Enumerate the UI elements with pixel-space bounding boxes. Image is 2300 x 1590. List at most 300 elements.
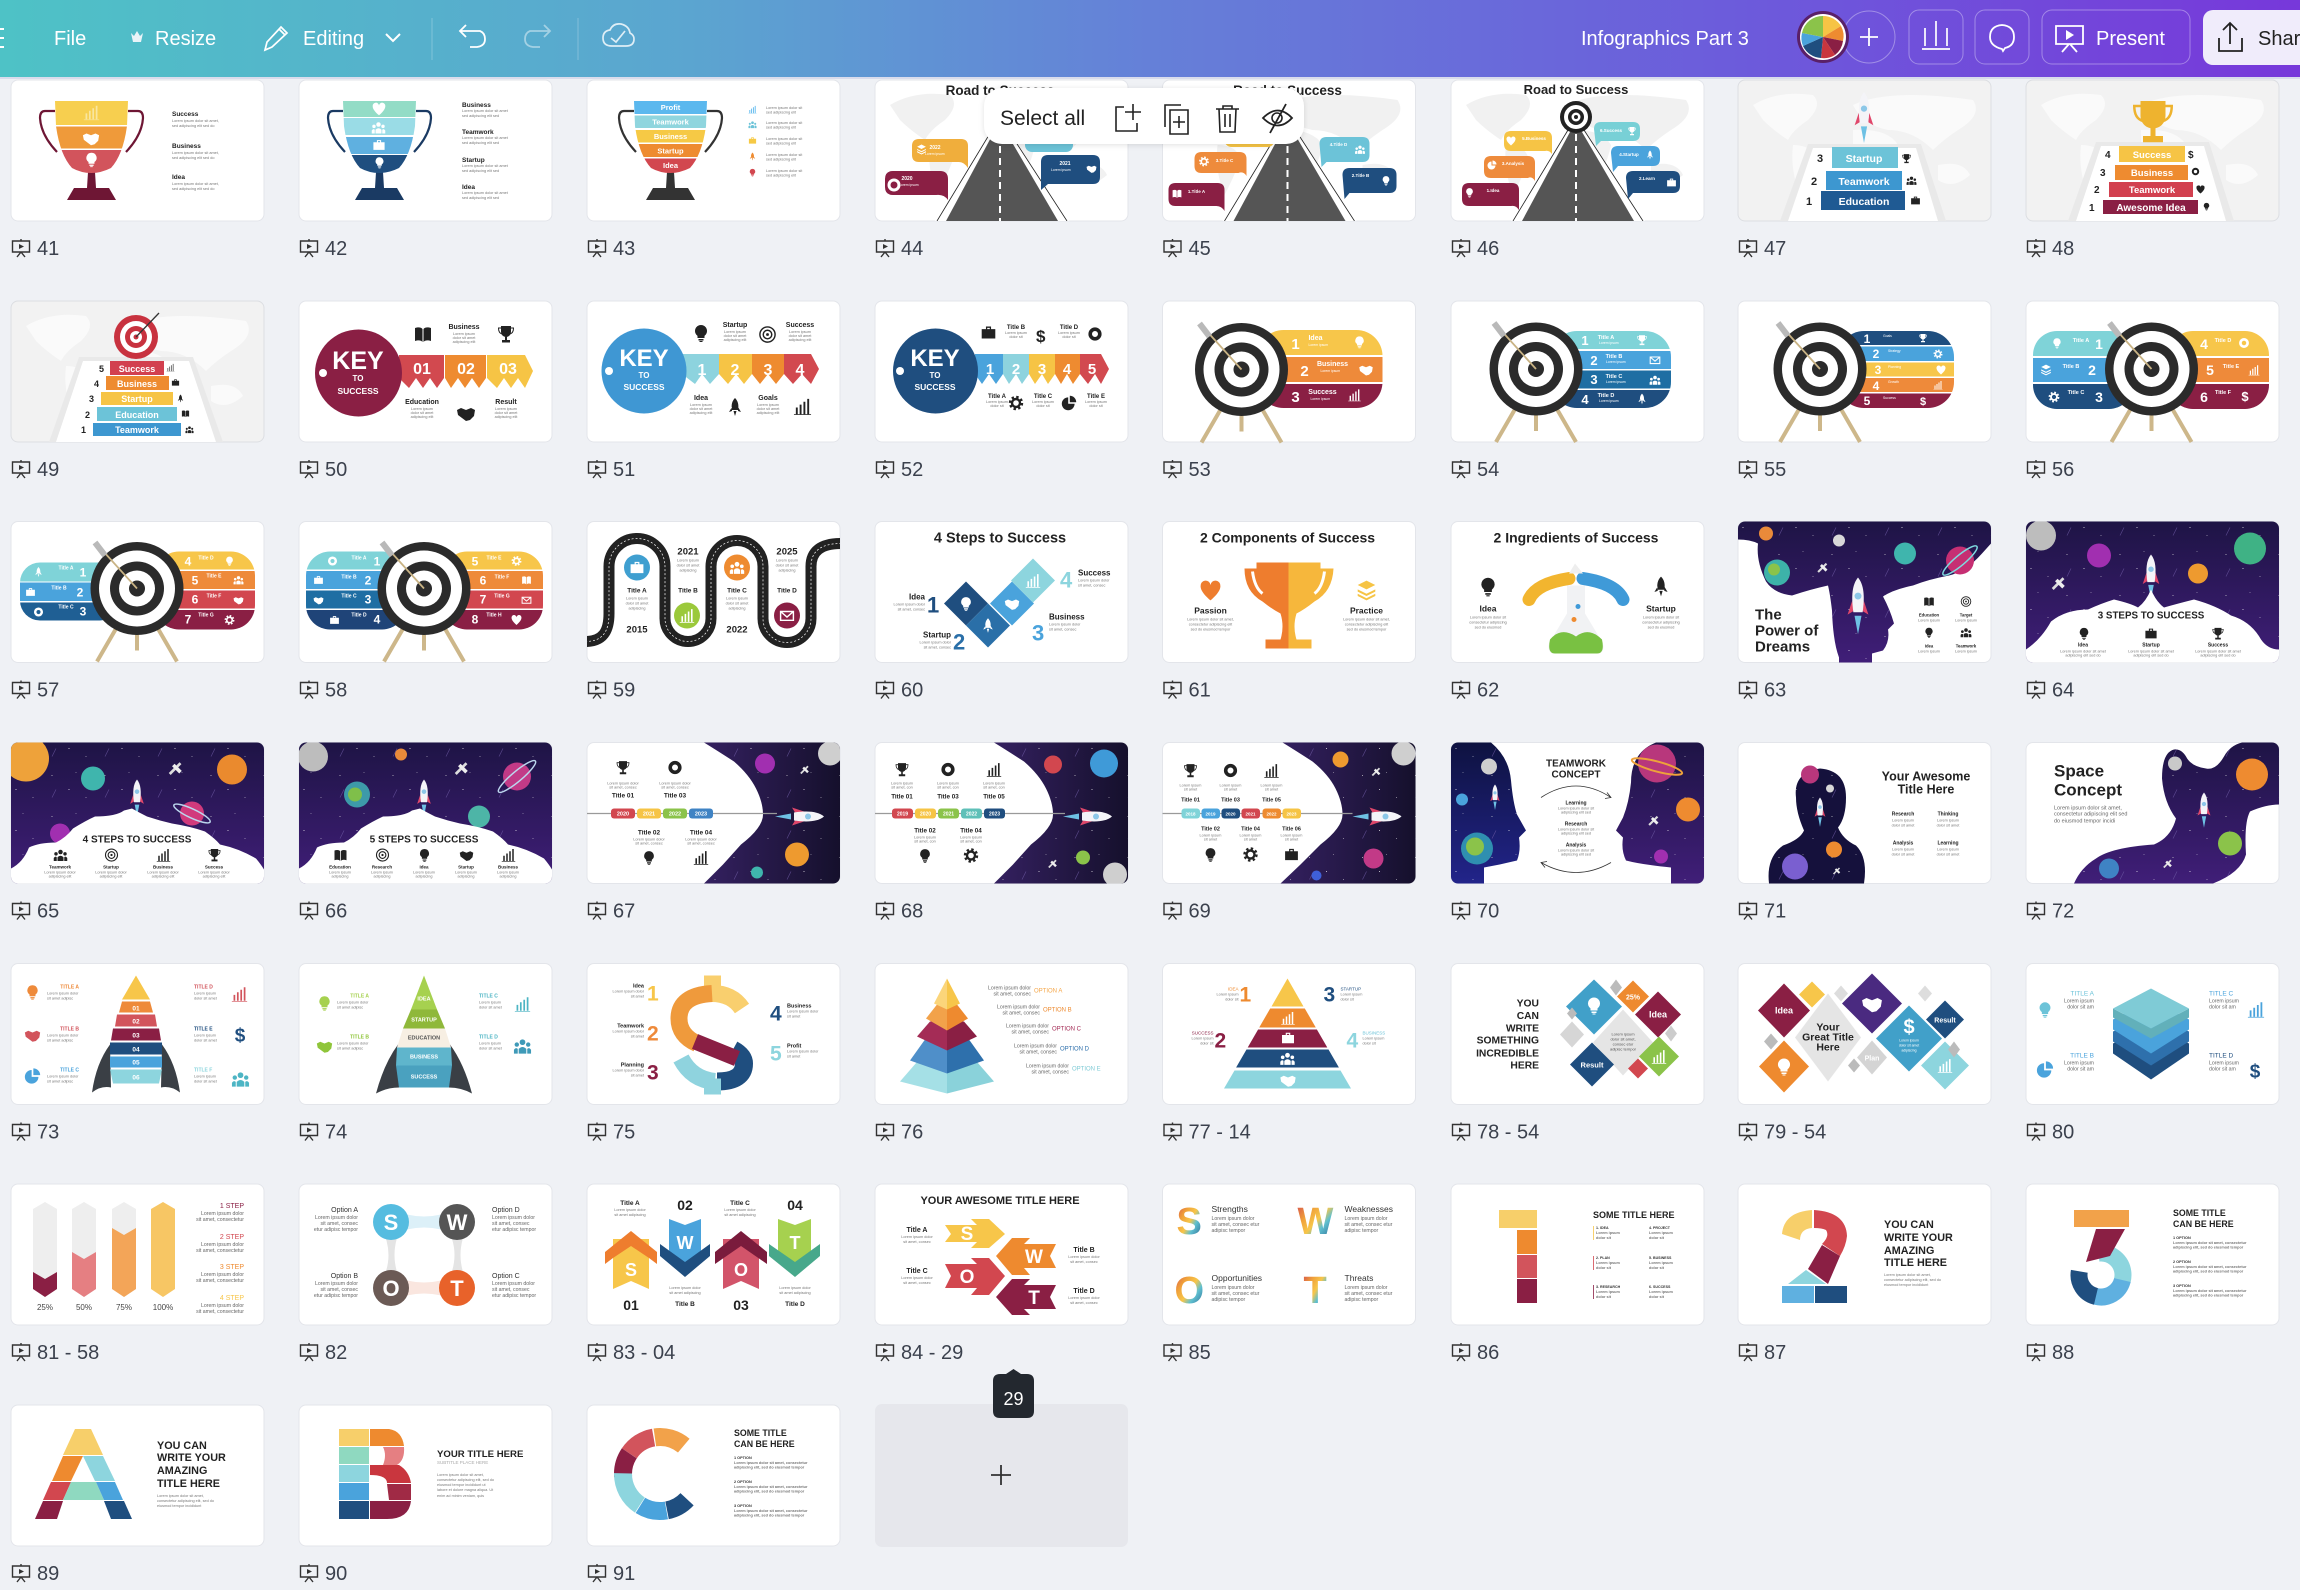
band labels: Title A [1598, 335, 1614, 341]
steps: Business [498, 864, 518, 870]
options: 2 OPTION [2173, 1260, 2191, 1264]
slide number 85: 85 [1188, 1342, 1211, 1364]
slide number 52 [876, 459, 923, 481]
options: Lorem ipsum dolor sit amet, consectetur [734, 1485, 808, 1489]
top items: sit amet [1265, 788, 1279, 792]
steps: 1 STEP [220, 1203, 244, 1210]
step labels: 4 [1060, 568, 1073, 592]
heading: AMAZING [1884, 1245, 1934, 1257]
steps: sit amet, consectetur [196, 1309, 244, 1315]
bottom items [914, 828, 982, 863]
options: dolor sit [1649, 1266, 1665, 1270]
key: 5 [1088, 361, 1096, 378]
labels: dolor sit am [2209, 1004, 2236, 1010]
rocket: 03 [132, 1032, 140, 1040]
options: Lorem ipsum [1649, 1261, 1673, 1265]
diamonds: dolor sit amet [1899, 1044, 1919, 1048]
icon grid: Lorem ipsum [1955, 650, 1977, 654]
trophy [328, 100, 431, 200]
title: Your Awesome [1882, 770, 1970, 784]
letters: S [1176, 1201, 1202, 1243]
title: Concept [2054, 780, 2122, 800]
options: Option B [331, 1273, 358, 1280]
slide number 44 [876, 238, 923, 260]
steps: Lorem ipsum [371, 870, 393, 874]
slide 56: target with six bands [2026, 301, 2279, 442]
title: TEAMWORK [1546, 758, 1607, 770]
year and title labels: Lorem ipsum [776, 558, 798, 562]
road and map [1466, 94, 1689, 221]
selection popup [984, 88, 1304, 144]
slide number 42 [300, 238, 347, 260]
letter B [339, 1429, 411, 1519]
numbered labels: 1 [647, 982, 659, 1006]
slide 55: target with five bands [1738, 301, 1991, 442]
labels: Weaknesses [1344, 1204, 1393, 1214]
road bubbles: 1.Title A [1188, 189, 1206, 194]
labels [2037, 990, 2264, 1082]
slide 75: dollar-sign puzzle [587, 964, 840, 1104]
left labels: sit amet adipisc [47, 996, 73, 1000]
icon list: Lorem ipsum dolor sit [766, 106, 803, 110]
labels: Lorem ipsum dolor [724, 1208, 756, 1212]
heading [734, 1428, 795, 1449]
body text: eiusmod tempor incididunt [157, 1504, 202, 1508]
options: 3 OPTION [2173, 1284, 2191, 1288]
slide number 53: 53 [1188, 459, 1211, 481]
timeline: 2020 [920, 812, 931, 818]
band labels: 4 [2200, 336, 2208, 352]
steps [1806, 147, 1920, 210]
right item: consectetur adipiscing [1642, 620, 1680, 624]
steps: adipiscing elit sed do [2133, 654, 2169, 658]
numbered labels: Lorem ipsum dolor [787, 1010, 819, 1014]
slide number 58 [300, 680, 347, 702]
band labels: Title D [2215, 338, 2231, 344]
icon list: sed adipiscing elit [766, 126, 797, 130]
steps: Education [329, 864, 351, 870]
key labels: Success [786, 322, 814, 329]
menu icon [0, 29, 4, 47]
key labels: Lorem ipsum [1005, 331, 1027, 335]
bottom items: Title 04 [1241, 826, 1261, 832]
four items [1892, 812, 1960, 856]
slide number 48: 48 [2052, 238, 2074, 260]
band labels: Title E [207, 574, 222, 580]
winding road [585, 538, 841, 642]
key: 3 [1038, 361, 1046, 378]
options: etur adipisc tempor [314, 1293, 358, 1299]
right item [1343, 581, 1390, 632]
timeline: 2021 [943, 812, 954, 818]
band labels: Growth [1888, 380, 1899, 384]
icon grid [1918, 597, 1977, 654]
options: OPTION E [1072, 1066, 1101, 1072]
band labels: 6 [480, 574, 487, 588]
band labels: 1 [374, 554, 381, 568]
slide 52: key with five teeth [875, 301, 1128, 442]
numbered labels: 2 [1214, 1030, 1226, 1052]
slide 48: trophy staircase [2026, 80, 2279, 221]
diamonds: adipisc tempor [1610, 1046, 1637, 1052]
labels: Opportunities [1212, 1273, 1262, 1283]
key labels: dolor sit [1009, 335, 1024, 339]
labels: Lorem ipsum [2209, 998, 2239, 1004]
steps: Lorem ipsum dolor sit amet [2128, 650, 2175, 654]
bottom items: sit amet [1244, 838, 1258, 842]
steps: Teamwork [1838, 176, 1890, 188]
body text: Lorem ipsum dolor sit amet, [437, 1473, 484, 1477]
key labels: adipiscing elit [690, 411, 713, 415]
band labels: 5 [192, 574, 199, 588]
labels: Business [462, 102, 491, 109]
labels: Lorem ipsum dolor sit amet [462, 164, 509, 168]
title: 2 Ingredients of Success [1494, 530, 1659, 546]
steps: 4 [2105, 150, 2111, 161]
band labels: 3 [80, 604, 87, 618]
bottom items [633, 830, 717, 865]
labels: Success [172, 111, 199, 118]
labels [172, 111, 219, 191]
top items: Title 01 [891, 794, 913, 800]
top items: Title 05 [983, 794, 1005, 800]
options: Lorem ipsum dolor sit amet, consectetur [734, 1461, 808, 1465]
road bubbles: 1.Idea [1487, 188, 1500, 193]
options: Lorem ipsum dolor sit amet, consectetur [2173, 1265, 2247, 1269]
labels [1212, 1204, 1393, 1303]
page count tooltip: 29 [1003, 1389, 1024, 1409]
key: 03 [499, 361, 517, 378]
body text: Lorem ipsum dolor sit amet, [2054, 806, 2122, 812]
options: dolor sit [1596, 1266, 1612, 1270]
right labels: dolor sit amet [194, 1080, 218, 1084]
band labels: Planning [1888, 365, 1901, 369]
icon list: sed adipiscing elit [766, 158, 797, 162]
rocket: BUSINESS [410, 1054, 438, 1060]
space shape [2074, 742, 2279, 884]
band labels: Title A [2073, 338, 2089, 344]
slide 89: letter A [11, 1405, 264, 1546]
slide number 91 [588, 1563, 635, 1585]
band labels: Title H [486, 612, 502, 618]
title: Space [2054, 762, 2104, 780]
year and title labels: Title D [777, 588, 797, 594]
slide 53: target with three bands [1162, 301, 1416, 442]
step labels: Business [1049, 612, 1085, 622]
heading: SUBTITLE PLACE HERE [437, 1460, 488, 1465]
steps: Idea [2078, 642, 2088, 648]
band labels: 3 [2095, 389, 2103, 405]
options: etur adipisc tempor [492, 1227, 536, 1233]
slide 81: percentage bars [11, 1184, 264, 1325]
chevrons [945, 1219, 1056, 1315]
icon list: sed adipiscing elit [766, 142, 797, 146]
options: 3. RESEARCH [1596, 1285, 1621, 1289]
labels: Lorem ipsum dolor sit amet [462, 191, 509, 195]
arrows and text: adipiscing elit sed [1561, 832, 1591, 836]
slide number 89 [12, 1563, 59, 1585]
labels: 01 [623, 1297, 639, 1313]
top items: sit amet [1224, 788, 1238, 792]
numbered labels: Teamwork [617, 1024, 645, 1030]
white hill [299, 808, 552, 884]
slide number 80: 80 [2052, 1122, 2074, 1144]
heading: CAN BE HERE [2173, 1219, 2234, 1229]
left item: sed do eiusmod tempor [1191, 628, 1231, 632]
options: Lorem ipsum dolor [492, 1281, 535, 1287]
slide 46: road with target and six stops [1451, 80, 1704, 221]
icon grid: Lorem ipsum [1918, 618, 1940, 622]
key labels: Lorem ipsum [411, 407, 433, 411]
heading [1802, 1022, 1854, 1054]
band labels: Title E [2223, 364, 2240, 370]
key: 3 [764, 362, 773, 379]
steps: 1 [2089, 203, 2095, 214]
slide number 60: 60 [901, 680, 923, 702]
slide number 49 [12, 459, 59, 481]
numbered labels: 4 [770, 1002, 782, 1026]
icon list [748, 106, 803, 178]
options [2173, 1236, 2247, 1298]
right labels: TITLE F [194, 1068, 212, 1074]
band labels: Title C [1606, 374, 1622, 380]
timeline: 2021 [1245, 812, 1256, 816]
year and title labels: Lorem ipsum [677, 558, 699, 562]
labels: Title A [620, 1200, 640, 1207]
labels: Title B [1073, 1247, 1095, 1254]
band labels: Lorem ipsum [1599, 341, 1619, 345]
road bubbles: 2.Learn [1639, 176, 1655, 181]
timeline: 2021 [643, 812, 655, 818]
letter C [608, 1422, 712, 1526]
labels: Lorem ipsum dolor [1068, 1255, 1100, 1259]
diamonds [1560, 980, 1681, 1086]
bottom items: Lorem ipsum [1200, 834, 1221, 838]
labels: Threats [1344, 1273, 1373, 1283]
slide number 43 [588, 238, 635, 260]
band labels: 1 [2095, 336, 2103, 352]
key labels: dolor sit amet [789, 334, 812, 338]
options: dolor sit [1649, 1236, 1665, 1240]
hide icon [1263, 104, 1292, 133]
slide 62: two ingredients of success [1451, 522, 1704, 662]
bars: 75% [116, 1303, 132, 1312]
steps [329, 849, 519, 878]
slide number 44: 44 [901, 238, 923, 260]
key: 2 [731, 362, 740, 379]
options: 1 OPTION [734, 1456, 752, 1460]
numbered labels: Lorem ipsum [1362, 1036, 1384, 1040]
steps: Awesome Idea [2116, 203, 2186, 214]
road bubbles: 2020 [901, 176, 913, 182]
steps: Lorem ipsum [413, 870, 435, 874]
band labels: 2 [365, 574, 372, 588]
band labels: 1 [1581, 333, 1589, 348]
timeline: 2020 [617, 812, 629, 818]
avatar [1797, 11, 1849, 63]
slide number 55: 55 [1764, 459, 1786, 481]
body text: consectetur adipiscing elit, sed do [1884, 1278, 1941, 1282]
title: YOUR AWESOME TITLE HERE [920, 1195, 1080, 1207]
key labels: dolor sit amet [757, 407, 780, 411]
stack [2113, 988, 2189, 1080]
slide 63: the power of dreams [1738, 522, 1991, 662]
four items: Thinking [1938, 812, 1958, 818]
step labels: Lorem ipsum dolor [920, 640, 952, 644]
options: Lorem ipsum dolor sit amet, consectetur [2173, 1241, 2247, 1245]
left item: consectetur adipiscing elit [1189, 622, 1233, 626]
slide number 54: 54 [1477, 459, 1499, 481]
road bubbles [885, 139, 1100, 200]
slide 78: diamonds with heading [1451, 964, 1704, 1104]
key labels: Result [495, 399, 517, 406]
labels: 04 [787, 1197, 803, 1213]
options: OPTION C [1052, 1026, 1082, 1032]
options: Lorem ipsum dolor [492, 1215, 535, 1221]
top toolbar [0, 0, 2300, 79]
steps: 4 [94, 379, 99, 389]
left labels: Lorem ipsum dolor [47, 1034, 79, 1038]
key [893, 328, 1109, 414]
options: Lorem ipsum dolor [988, 986, 1031, 992]
steps: 3 STEP [220, 1264, 244, 1271]
options: sit amet, consec [1032, 1070, 1069, 1076]
arrows: O [734, 1260, 748, 1280]
timeline [875, 808, 1112, 826]
slide 50: key with three teeth [299, 301, 552, 442]
labels: Lorem ipsum dolor sit amet, [172, 151, 219, 155]
slide number 90 [300, 1563, 347, 1585]
year and title labels: Title C [727, 588, 747, 594]
key labels: Lorem ipsum [495, 407, 517, 411]
steps: adipiscing [500, 874, 516, 878]
band labels: 1 [80, 566, 87, 580]
body text: enim ad minim veniam, quis [437, 1494, 484, 1498]
slide number 65 [12, 900, 59, 922]
labels: dolor sit am [2067, 1004, 2094, 1010]
bottom items: Lorem ipsum [1281, 834, 1302, 838]
right labels: Lorem ipsum [194, 1074, 216, 1078]
letters [1174, 1201, 1334, 1312]
body text: consectetur adipiscing elit, sed do [157, 1499, 214, 1503]
top items [891, 763, 1005, 800]
steps: Idea [419, 864, 429, 870]
letters: O [1174, 1270, 1204, 1312]
steps: Business [117, 379, 157, 389]
road bubbles: 5.Business [1522, 136, 1546, 141]
year and title labels: 2025 [776, 546, 798, 558]
steps: Lorem ipsum dolor [147, 870, 179, 874]
slide number 57 [12, 680, 59, 702]
right labels: Lorem ipsum [194, 1034, 216, 1038]
slide 66: five steps to success, space [298, 742, 552, 884]
options: 1. IDEA [1596, 1226, 1609, 1230]
slide number 59 [588, 680, 635, 702]
rocket: 02 [132, 1018, 140, 1026]
key labels [690, 322, 814, 416]
options: 2 OPTION [734, 1480, 752, 1484]
band labels: Lorem ipsum [1606, 380, 1626, 384]
title: 4 Steps to Success [934, 530, 1066, 546]
labels [317, 994, 531, 1054]
step labels: sit amet, consec [924, 646, 951, 650]
labels: Title B [675, 1301, 695, 1308]
labels: Title C [730, 1200, 750, 1207]
icon: trophy [2134, 101, 2172, 142]
right item: Practice [1350, 606, 1383, 616]
heading: YOU CAN [157, 1440, 207, 1452]
key labels: adipiscing elit [495, 415, 518, 419]
heading: YOU [1517, 998, 1539, 1010]
bottom items: Title 04 [960, 828, 982, 834]
icon list: sed adipiscing elit [766, 174, 797, 178]
arrows and text: adipiscing elit sed [1561, 810, 1591, 814]
pyramid [900, 978, 994, 1094]
map and steps backdrop [2068, 142, 2234, 221]
band labels [314, 554, 531, 626]
steps: Success [119, 364, 155, 374]
band labels: 3 [1291, 389, 1300, 406]
space scene [2026, 520, 2279, 662]
steps: Lorem ipsum dolor sit amet [2195, 650, 2242, 654]
icon list: Lorem ipsum dolor sit [766, 153, 803, 157]
rocket: EDUCATION [408, 1036, 440, 1042]
heading [1476, 998, 1539, 1072]
select all: Select all [1000, 107, 1085, 130]
labels: sed adipiscing elit sed do [172, 156, 214, 160]
labels: sit amet, consec etur [1344, 1222, 1393, 1228]
heading: Here [1816, 1042, 1840, 1054]
labels [901, 1227, 1100, 1305]
steps: Research [372, 864, 392, 870]
letters: W [1298, 1201, 1334, 1243]
bands [1850, 331, 1954, 408]
labels: TITLE A [350, 994, 369, 1000]
band labels: Lorem ipsum [1599, 399, 1619, 403]
left item [1469, 578, 1507, 630]
document title: Infographics Part 3 [1581, 28, 1749, 50]
labels: TITLE C [479, 994, 498, 1000]
slide 70: teamwork concept, two heads [1451, 742, 1704, 884]
slide number 50: 50 [325, 459, 347, 481]
diamonds: Result [1934, 1018, 1956, 1024]
slide number 71: 71 [1764, 900, 1786, 922]
slide number 47: 47 [1764, 238, 1786, 260]
slide 77: pyramid with four steps [1162, 964, 1416, 1104]
labels: Lorem ipsum dolor [779, 1286, 811, 1290]
key labels: dolor sit amet [495, 411, 518, 415]
slide number 59: 59 [613, 680, 635, 702]
slide number 80 [2028, 1122, 2074, 1144]
add page icon [1116, 104, 1141, 131]
slide number 63: 63 [1764, 680, 1786, 702]
numbered labels: Lorem ipsum [1217, 992, 1238, 996]
title [1882, 770, 1970, 796]
numbered labels [613, 982, 819, 1084]
labels: TITLE B [2070, 1052, 2094, 1060]
key labels: Lorem ipsum [690, 403, 712, 407]
numbered labels: Lorem ipsum [1192, 1036, 1214, 1040]
key labels: Lorem ipsum [1032, 400, 1054, 404]
options [314, 1207, 536, 1299]
labels: sed adipiscing elit sed [462, 141, 499, 145]
options: Lorem ipsum [1649, 1290, 1673, 1294]
milestones [624, 554, 800, 628]
diamond puzzle [944, 558, 1055, 648]
timeline [587, 808, 824, 826]
top items: sit amet, con [983, 786, 1005, 790]
numbered labels: Profit [787, 1044, 802, 1050]
